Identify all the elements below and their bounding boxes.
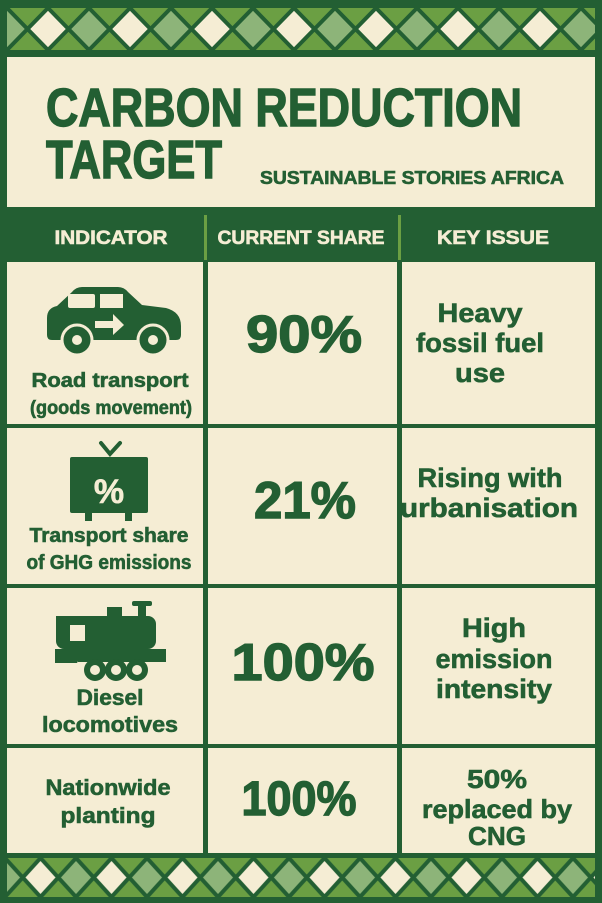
table grid: [7, 262, 595, 853]
icon: train: [55, 601, 166, 681]
row: road transport: (goods movement): [30, 398, 192, 419]
row: diesel locomotives: intensity: [436, 674, 552, 704]
top diamond band: [7, 8, 595, 50]
header row: [7, 207, 595, 260]
icon: car: [47, 287, 181, 355]
row: nationwide planting: 50%: [467, 764, 527, 794]
row: transport GHG share: 21%: [254, 472, 356, 530]
row: nationwide planting: 100%: [242, 773, 356, 826]
title: TARGET: [46, 130, 222, 190]
header row: CURRENT SHARE: [218, 228, 384, 249]
row: transport GHG share: Rising with: [418, 463, 562, 493]
subtitle: SUSTAINABLE STORIES AFRICA: [260, 168, 564, 188]
row: road transport: [30, 287, 544, 419]
row: transport GHG share: [26, 443, 578, 574]
row: diesel locomotives: 100%: [232, 634, 374, 692]
title: CARBON REDUCTION: [46, 78, 522, 138]
row: diesel locomotives: [42, 601, 552, 737]
row: nationwide planting: replaced by: [422, 794, 573, 824]
row: diesel locomotives: locomotives: [42, 712, 178, 737]
row: road transport: Road transport: [32, 370, 189, 392]
row: nationwide planting: Nationwide: [46, 775, 170, 800]
title panel: [7, 57, 595, 207]
icon: percent screen: [70, 443, 148, 521]
title: [46, 78, 522, 190]
row: diesel locomotives: emission: [436, 644, 552, 674]
header row: INDICATOR: [54, 228, 168, 249]
row: nationwide planting: [46, 764, 573, 851]
row: road transport: fossil fuel: [416, 328, 544, 358]
icon: percent screen: %: [94, 473, 124, 511]
bottom diamond band: [7, 858, 595, 897]
row: transport GHG share: Transport share: [30, 525, 188, 547]
row: diesel locomotives: High: [462, 613, 526, 643]
row: road transport: use: [455, 358, 505, 388]
row: transport GHG share: of GHG emissions: [26, 552, 192, 574]
row: nationwide planting: CNG: [468, 821, 526, 851]
row: road transport: 90%: [246, 306, 362, 364]
header row: KEY ISSUE: [437, 228, 549, 249]
row: road transport: Heavy: [438, 298, 522, 328]
row: diesel locomotives: Diesel: [76, 685, 144, 710]
row: nationwide planting: planting: [60, 803, 156, 828]
row: transport GHG share: urbanisation: [400, 493, 578, 523]
